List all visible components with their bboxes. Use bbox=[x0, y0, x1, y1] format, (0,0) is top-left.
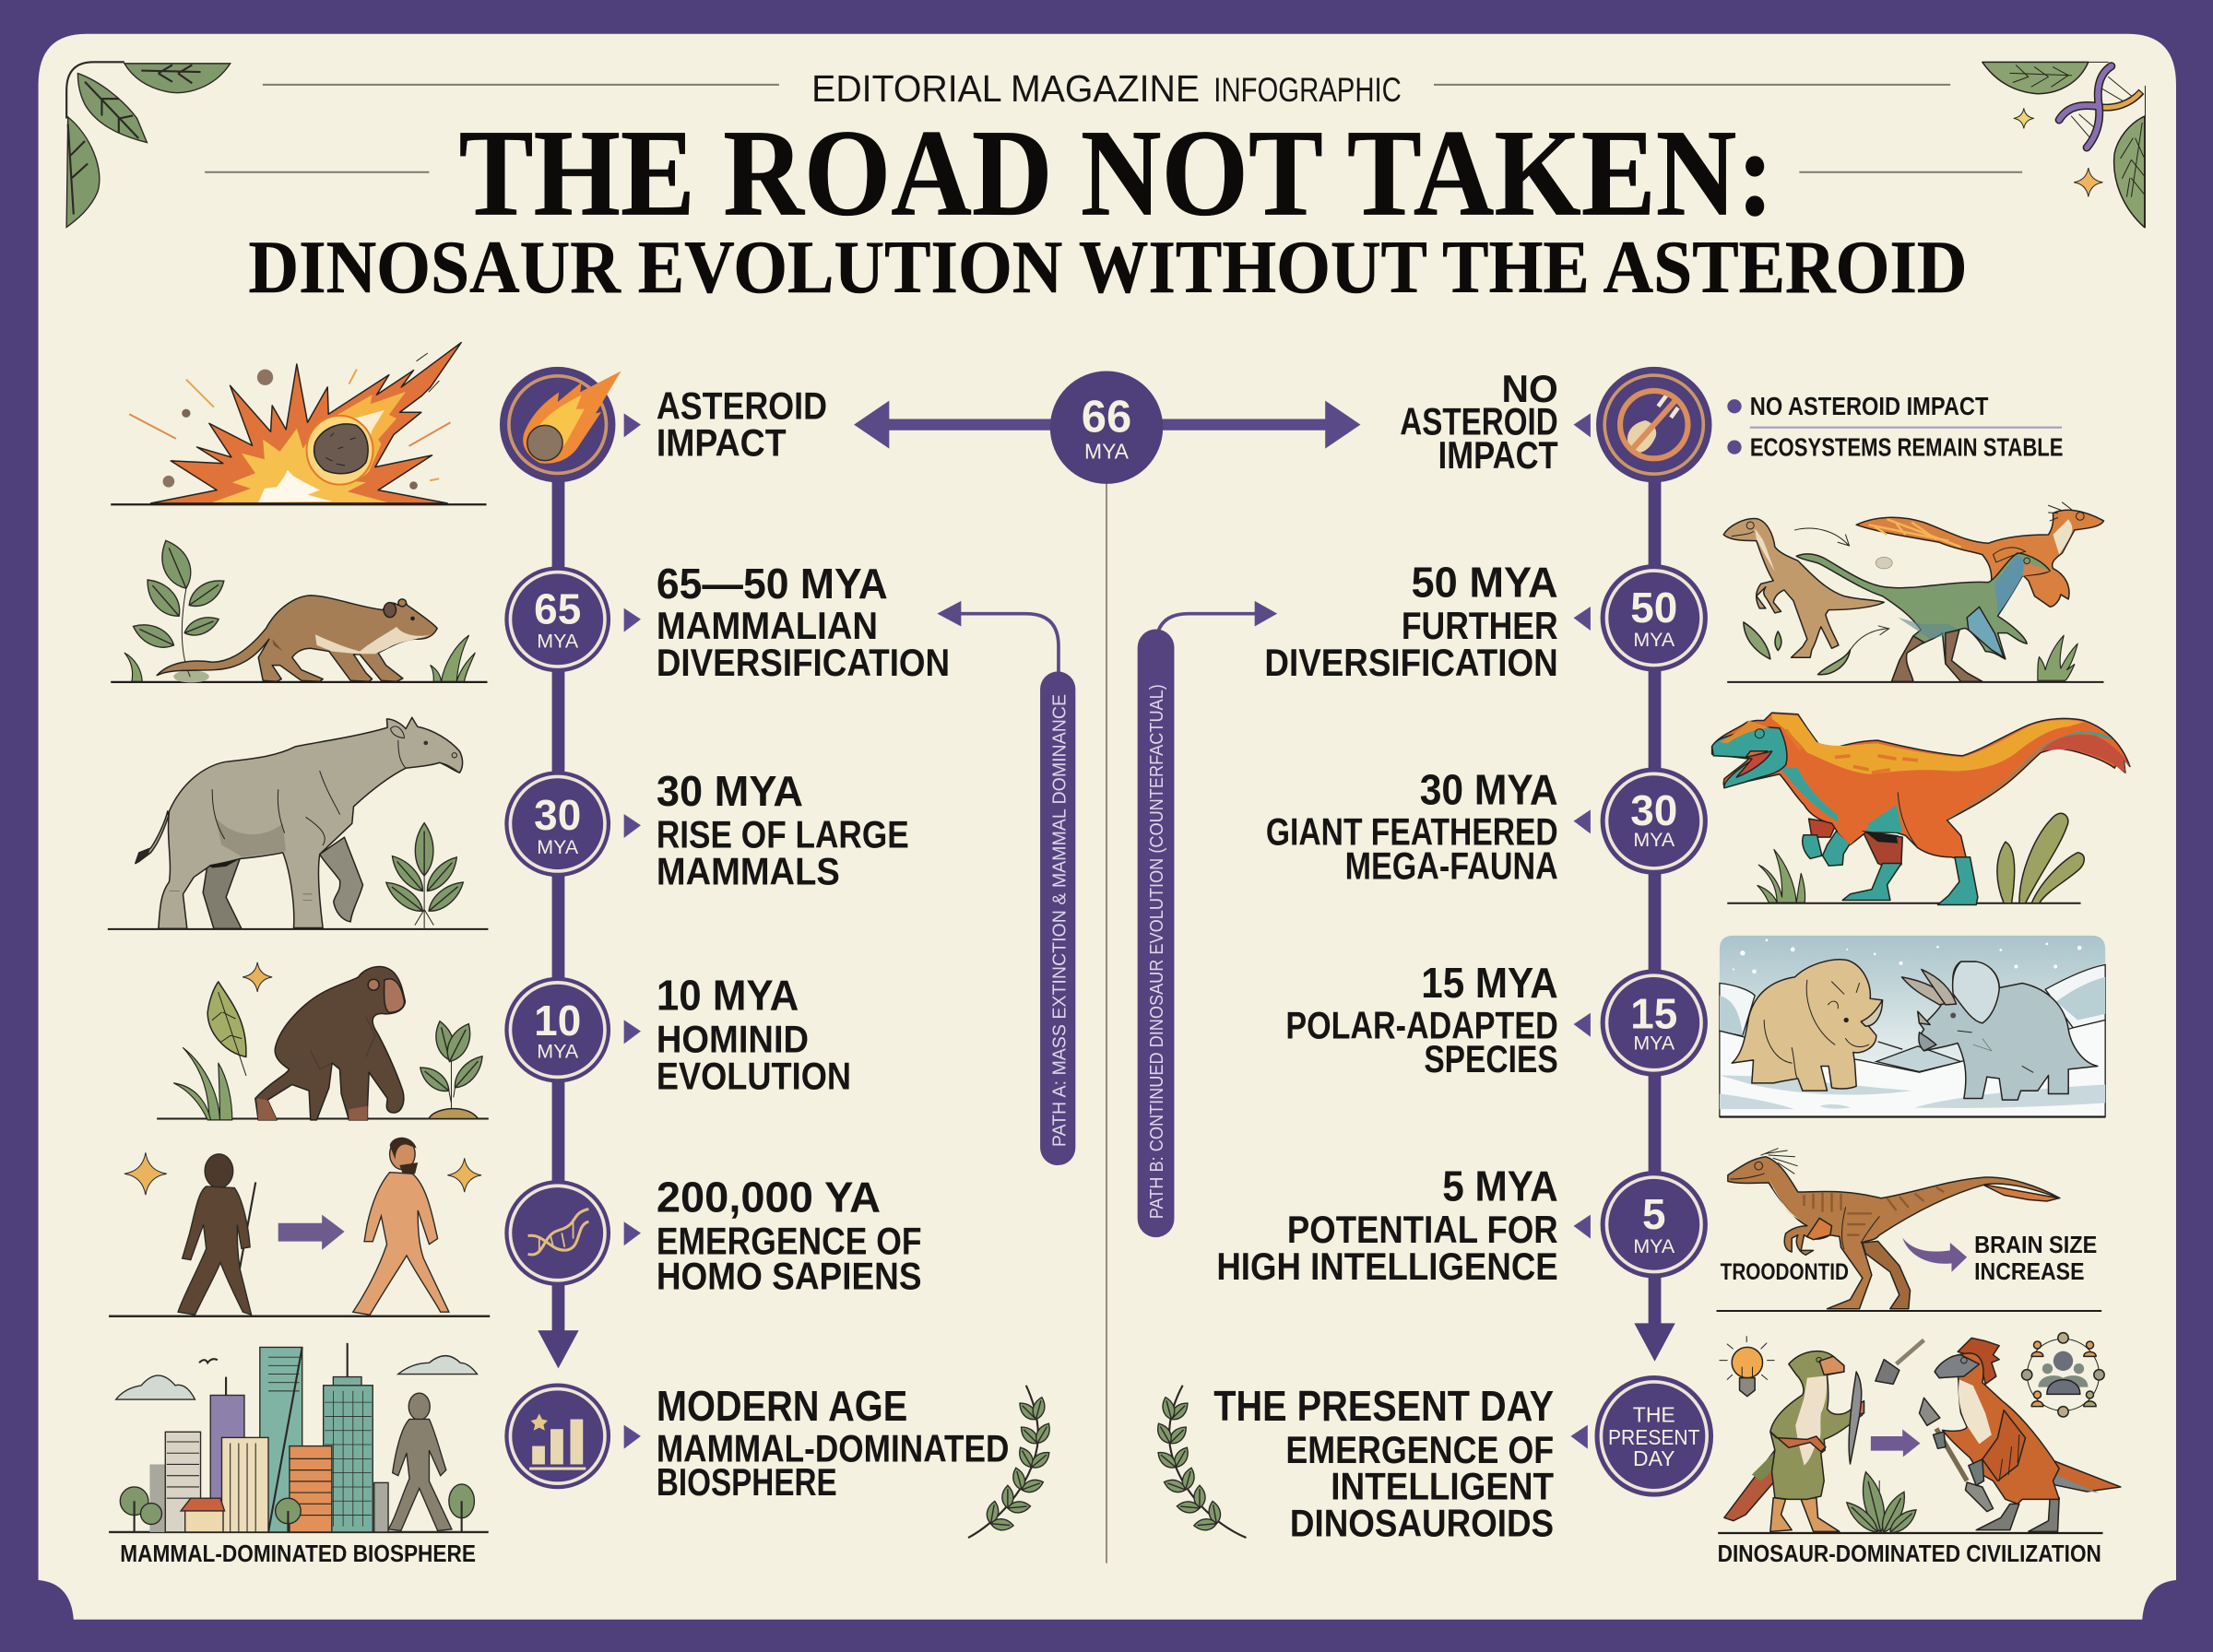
label: present day: EMERGENCE OF bbox=[1285, 1428, 1554, 1471]
label: 65-50 MYA: DIVERSIFICATION bbox=[657, 641, 950, 684]
illustration: troodontid: BRAIN SIZE bbox=[1974, 1231, 2097, 1258]
node: 15 MYA: 15 bbox=[1630, 990, 1677, 1038]
illustration: large mammal bbox=[108, 717, 488, 929]
label: present day: INTELLIGENT bbox=[1331, 1465, 1554, 1508]
illustration: giant feathered mega-fauna bbox=[1712, 713, 2130, 904]
header rules bbox=[205, 85, 2022, 172]
path B pill and connector bbox=[1138, 601, 1277, 1237]
label: modern age bbox=[657, 1382, 1009, 1504]
node: the present day: PRESENT bbox=[1608, 1425, 1699, 1449]
kicker: editorial magazine infographic: INFOGRAPHIC bbox=[1213, 70, 1402, 109]
label: 200,000 YA: HOMO SAPIENS bbox=[657, 1255, 922, 1298]
label: present day: DINOSAUROIDS bbox=[1290, 1502, 1554, 1545]
node: 50 MYA: MYA bbox=[1633, 629, 1675, 651]
node: the present day: DAY bbox=[1633, 1446, 1675, 1470]
label: 10 MYA bbox=[657, 972, 851, 1097]
subtitle: DINOSAUR EVOLUTION WITHOUT THE ASTEROID bbox=[249, 226, 1967, 309]
illustration: diversifying raptors bbox=[1723, 502, 2104, 682]
node: 15 MYA bbox=[1601, 969, 1708, 1077]
illustration: troodontid: INCREASE bbox=[1974, 1257, 2085, 1285]
label: asteroid impact bbox=[657, 384, 827, 464]
label: 30 MYA left: 30 MYA bbox=[657, 767, 803, 815]
node: 65 MYA bbox=[504, 566, 610, 672]
kicker: editorial magazine infographic bbox=[811, 67, 1402, 110]
label: asteroid impact: IMPACT bbox=[657, 420, 787, 464]
label: no asteroid impact: ASTEROID bbox=[1400, 399, 1558, 442]
label: 10 MYA: EVOLUTION bbox=[657, 1054, 851, 1097]
corner ornament: top right leaves and DNA bbox=[1982, 62, 2145, 228]
node: DNA emergence bbox=[504, 1180, 610, 1286]
illustration: early mammal with plants bbox=[111, 536, 488, 683]
node: 10 MYA: MYA bbox=[537, 1041, 579, 1063]
label: no asteroid impact: NO bbox=[1501, 367, 1558, 410]
path B pill and connector: PATH B: CONTINUED DINOSAUR EVOLUTION (COUNTERFACTUAL) bbox=[1146, 684, 1167, 1219]
label: modern age: MAMMAL-DOMINATED bbox=[657, 1426, 1009, 1469]
label: modern age: MODERN AGE bbox=[657, 1382, 907, 1430]
node: 10 MYA bbox=[504, 977, 610, 1083]
node: 66 MYA: 66 bbox=[1082, 392, 1131, 442]
title: THE ROAD NOT TAKEN: bbox=[459, 105, 1774, 242]
node: the present day bbox=[1594, 1375, 1713, 1497]
label: 50 MYA: FURTHER bbox=[1402, 604, 1558, 647]
node: 65 MYA: 65 bbox=[534, 584, 581, 632]
label: 5 MYA: HIGH INTELLIGENCE bbox=[1216, 1245, 1558, 1288]
laurel left bbox=[968, 1386, 1054, 1538]
node: 5 MYA: MYA bbox=[1633, 1235, 1675, 1257]
node: 5 MYA: 5 bbox=[1642, 1190, 1666, 1238]
label: 65-50 MYA: 65—50 MYA bbox=[657, 560, 888, 608]
node: asteroid impact icon bbox=[500, 367, 621, 482]
label: 200,000 YA: EMERGENCE OF bbox=[657, 1219, 922, 1262]
node: 50 MYA: 50 bbox=[1630, 584, 1677, 631]
illustration: asteroid impact explosion bbox=[111, 343, 487, 504]
label: 10 MYA: HOMINID bbox=[657, 1018, 809, 1061]
label: 15 MYA: SPECIES bbox=[1424, 1037, 1558, 1080]
node: modern age bars bbox=[504, 1383, 610, 1489]
illustration: intelligent dinosauroids bbox=[1718, 1333, 2121, 1537]
node: 66 MYA: MYA bbox=[1084, 439, 1130, 463]
notes: stable ecosystems bbox=[1727, 392, 2064, 461]
label: 30 MYA left: MAMMALS bbox=[657, 850, 840, 893]
label: 50 MYA: 50 MYA bbox=[1412, 558, 1558, 606]
label: 30 MYA right: 30 MYA bbox=[1420, 765, 1558, 813]
illustration: troodontid bbox=[1717, 1149, 2101, 1311]
node: 30 MYA left: 30 bbox=[534, 791, 581, 839]
label: 50 MYA: DIVERSIFICATION bbox=[1264, 641, 1558, 684]
right timeline spine bbox=[1634, 479, 1675, 1362]
node: 30 MYA right: 30 bbox=[1630, 786, 1677, 834]
node: 5 MYA bbox=[1601, 1171, 1708, 1278]
node: 30 MYA right: MYA bbox=[1633, 829, 1675, 851]
label: modern age: BIOSPHERE bbox=[657, 1460, 837, 1504]
label: 5 MYA: POTENTIAL FOR bbox=[1287, 1208, 1558, 1251]
label: 200,000 YA: 200,000 YA bbox=[657, 1174, 881, 1221]
node: 66 MYA bbox=[1050, 371, 1163, 484]
label: 30 MYA right: MEGA-FAUNA bbox=[1345, 844, 1558, 887]
label: 15 MYA bbox=[1285, 959, 1558, 1080]
illustration: troodontid: TROODONTID bbox=[1721, 1259, 1849, 1285]
node: the present day: THE bbox=[1633, 1403, 1675, 1427]
notes: stable ecosystems: NO ASTEROID IMPACT bbox=[1750, 392, 1989, 420]
illustration: polar-adapted dinosaurs bbox=[1720, 936, 2105, 1117]
caption: dinosaur-dominated civilization: DINOSAUR-DOMINATED CIVILIZATION bbox=[1718, 1541, 2101, 1567]
node: 30 MYA left bbox=[504, 771, 610, 877]
label: 5 MYA bbox=[1216, 1162, 1558, 1288]
caption: mammal-dominated biosphere: MAMMAL-DOMINATED BIOSPHERE bbox=[120, 1541, 476, 1567]
label: 15 MYA: 15 MYA bbox=[1421, 959, 1558, 1007]
illustration: homo sapiens transition bbox=[109, 1138, 490, 1316]
node: 10 MYA: 10 bbox=[534, 997, 581, 1044]
left timeline spine bbox=[538, 479, 579, 1368]
node: no asteroid icon bbox=[1596, 367, 1712, 482]
label: no asteroid impact bbox=[1400, 367, 1558, 477]
label: 200,000 YA bbox=[657, 1174, 922, 1298]
laurel right bbox=[1154, 1386, 1247, 1538]
label: 30 MYA left bbox=[657, 767, 909, 893]
label: 65-50 MYA bbox=[657, 560, 950, 684]
label: present day bbox=[1213, 1382, 1554, 1545]
node: 15 MYA: MYA bbox=[1633, 1032, 1675, 1055]
label: 50 MYA bbox=[1264, 558, 1558, 684]
label: no asteroid impact: IMPACT bbox=[1438, 433, 1558, 477]
label: 65-50 MYA: MAMMALIAN bbox=[657, 604, 878, 647]
node: 30 MYA left: MYA bbox=[537, 836, 579, 858]
corner ornament: top left leaves bbox=[66, 62, 231, 227]
split arrows from 66 MYA bbox=[854, 401, 1360, 449]
triangles: left pointers bbox=[624, 413, 641, 1449]
kicker: editorial magazine infographic: EDITORIAL MAGAZINE bbox=[811, 67, 1200, 110]
label: 5 MYA: 5 MYA bbox=[1442, 1162, 1558, 1210]
illustration: modern city with human bbox=[109, 1343, 489, 1532]
label: asteroid impact: ASTEROID bbox=[657, 384, 827, 428]
label: 30 MYA right: GIANT FEATHERED bbox=[1266, 810, 1558, 854]
label: present day: THE PRESENT DAY bbox=[1213, 1382, 1554, 1430]
notes: stable ecosystems: ECOSYSTEMS REMAIN STABLE bbox=[1750, 432, 2064, 461]
triangles: right pointers bbox=[1570, 413, 1591, 1449]
path A pill and connector: PATH A: MASS EXTINCTION & MAMMAL DOMINANCE bbox=[1049, 694, 1071, 1147]
path A pill and connector bbox=[937, 601, 1075, 1165]
node: 30 MYA right bbox=[1601, 767, 1708, 875]
label: 10 MYA: 10 MYA bbox=[657, 972, 799, 1020]
illustration: hominid ape bbox=[157, 962, 489, 1120]
node: 65 MYA: MYA bbox=[537, 630, 579, 652]
node: 50 MYA bbox=[1601, 564, 1708, 671]
label: 30 MYA left: RISE OF LARGE bbox=[657, 813, 909, 856]
center divider line bbox=[1106, 477, 1107, 1564]
label: 15 MYA: POLAR-ADAPTED bbox=[1285, 1003, 1558, 1046]
label: 30 MYA right bbox=[1266, 765, 1558, 887]
